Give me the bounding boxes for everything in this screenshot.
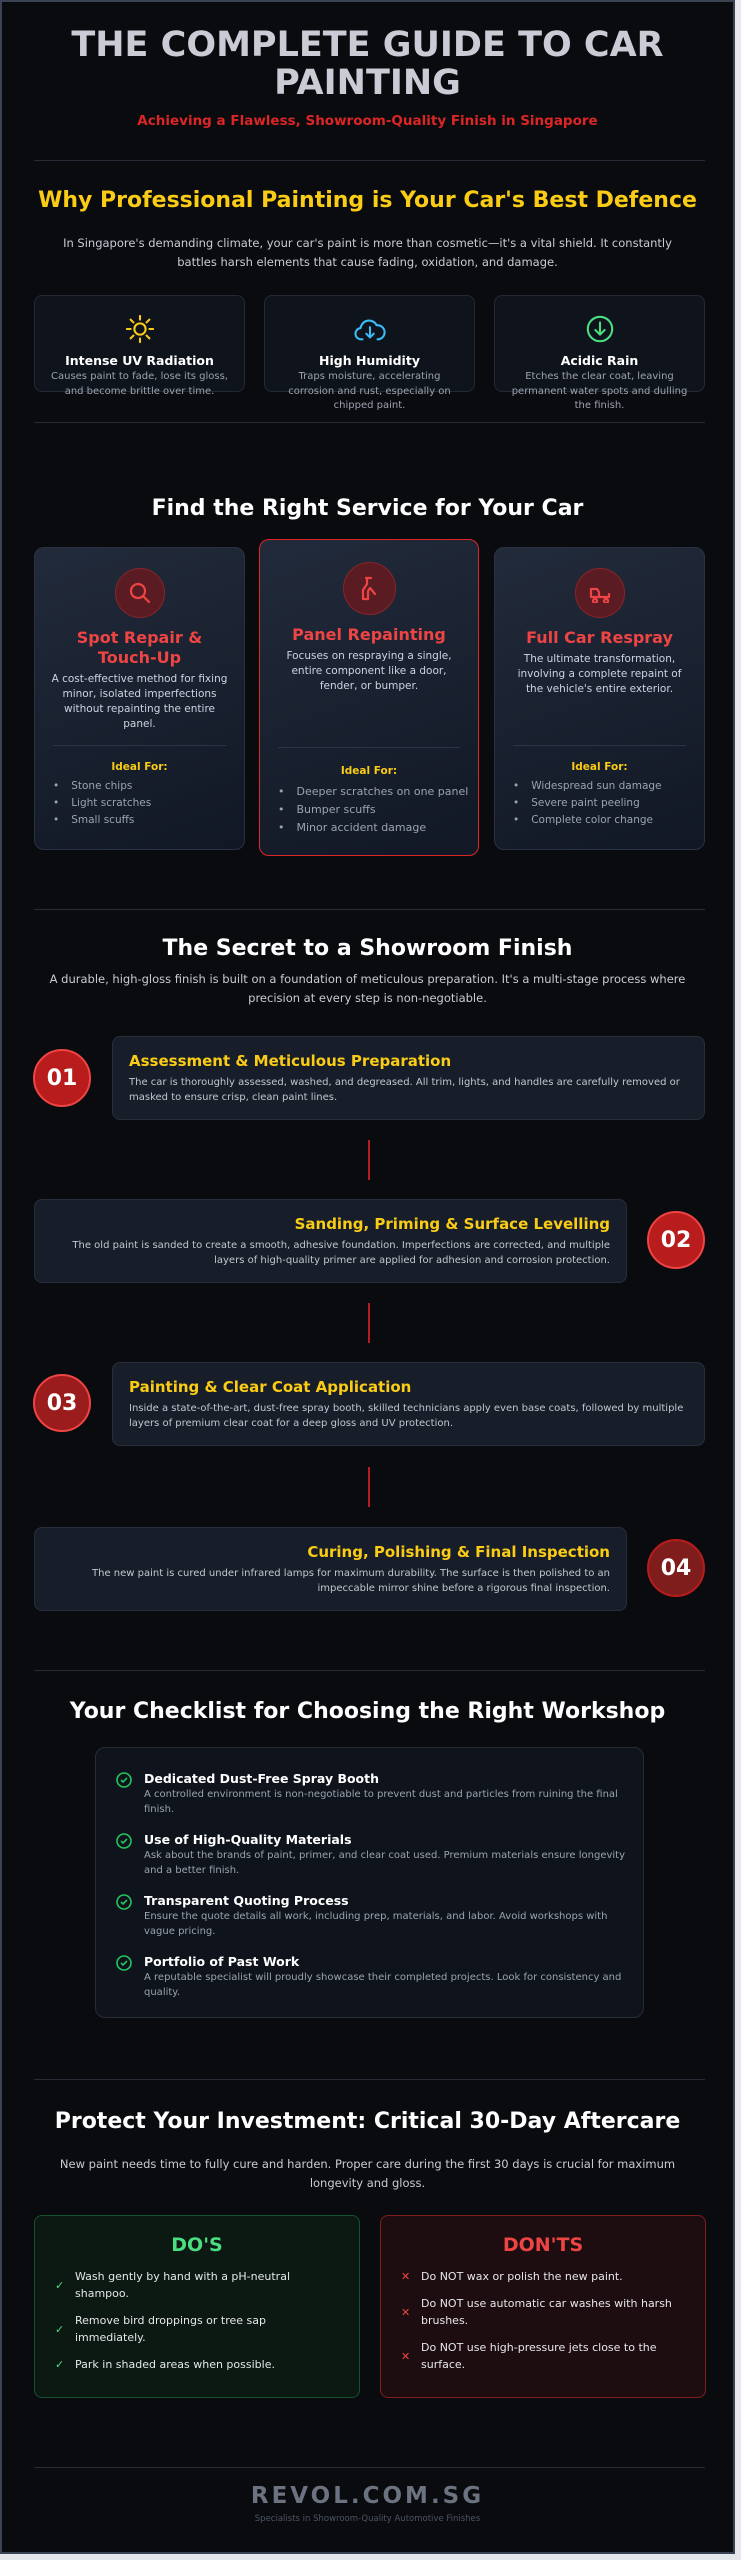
panel: don'ts: ✕ (401, 2270, 410, 2283)
service: full respray: Complete color change (531, 814, 653, 826)
service: full respray: Severe paint peeling (531, 797, 640, 809)
panel: don'ts: DON'TS (503, 2234, 583, 2256)
intro paragraph: In Singapore's demanding climate, your car's paint is more than cosmetic—it's a vital shield. It constantly battles harsh elements that cause fading, oxidation, and damage. (63, 236, 672, 269)
step 1 card (112, 1036, 705, 1120)
footer tagline: Specialists in Showroom-Quality Automotive Finishes (255, 2514, 480, 2524)
item: quoting: Transparent Quoting Process (144, 1893, 349, 1908)
panel: do's: ✓ (55, 2322, 64, 2336)
item: portfolio (116, 1954, 621, 1998)
service: spot repair: Spot Repair & (77, 628, 202, 647)
step 3 number: 03 (47, 1390, 77, 1416)
icon: magnifier (114, 568, 164, 618)
item: spray booth: A controlled environment is non-negotiable to prevent dust and particles from ruining the final finish. (144, 1789, 618, 1815)
service: full respray: Widespread sun damage (531, 780, 662, 792)
panel: don'ts: ✕ (401, 2350, 410, 2362)
heading: checklist: Your Checklist for Choosing the Right Workshop (70, 1699, 665, 1724)
service: panel repainting: Bumper scuffs (296, 803, 376, 816)
footer brand: REVOL.COM.SG (251, 2483, 484, 2509)
step 4 card: Curing, Polishing & Final Inspection (307, 1543, 610, 1561)
icon: arrow circle (586, 316, 614, 342)
step 3 card: Inside a state-of-the-art, dust-free spray booth, skilled technicians apply even base coats, followed by multiple layers of premium clear coat for a deep gloss and UV protection. (129, 1403, 683, 1429)
service: full respray: Ideal For: (571, 761, 628, 773)
service: full respray: Full Car Respray (526, 628, 673, 647)
step 2 number: 02 (661, 1228, 691, 1252)
card: UV (34, 295, 245, 392)
item: portfolio: A reputable specialist will proudly showcase their completed projects. Look for consistency and quality. (144, 1972, 621, 1998)
secret paragraph: A durable, high-gloss finish is built on a foundation of meticulous preparation. It's a multi-stage process where precision at every step is non-negotiable. (50, 972, 685, 1005)
service: spot repair: A cost-effective method for fixing minor, isolated imperfections without repainting the entire panel. (52, 673, 227, 730)
item: materials: Ask about the brands of paint, primer, and clear coat used. Premium materials ensure longevity and a better finish. (144, 1850, 625, 1876)
panel: do's: DO'S (171, 2234, 223, 2256)
step 1 card: The car is thoroughly assessed, washed, and degreased. All trim, lights, and handles are carefully removed or masked to ensure crisp, clean paint lines. (129, 1077, 680, 1103)
item: spray booth: Dedicated Dust-Free Spray Booth (144, 1771, 379, 1786)
panel: don'ts: Do NOT wax or polish the new paint. (421, 2270, 623, 2283)
panel: do's (34, 2215, 360, 2398)
connector (368, 1303, 370, 1343)
step 2 number (647, 1211, 705, 1269)
checklist panel (95, 1747, 644, 2018)
panel: do's: ✓ (55, 2358, 64, 2371)
card: UV: Intense UV Radiation (65, 353, 214, 368)
step 1 card: Assessment & Meticulous Preparation (129, 1052, 451, 1070)
step 1 number (33, 1049, 91, 1107)
item: quoting: Ensure the quote details all work, including prep, materials, and labor. Avoid workshops with vague pricing. (144, 1911, 607, 1937)
service: spot repair: Touch-Up (98, 648, 181, 667)
connector (368, 1140, 370, 1180)
heading: why professional painting: Why Professional Painting is Your Car's Best Defence (38, 188, 697, 213)
service: spot repair (34, 547, 245, 850)
card: humidity (264, 295, 475, 392)
step 2 card (34, 1199, 627, 1283)
subtitle: Achieving a Flawless, Showroom-Quality Finish in Singapore (137, 113, 598, 129)
icon: cloud (354, 320, 386, 340)
panel: don'ts (380, 2215, 706, 2398)
card: acid rain: Acidic Rain (561, 353, 638, 368)
service: panel repainting: Ideal For: (341, 765, 397, 777)
icon: car (574, 568, 624, 618)
item: materials (116, 1832, 625, 1876)
card: humidity: High Humidity (319, 353, 420, 368)
step 3 card (112, 1362, 705, 1446)
item: quoting (116, 1893, 607, 1937)
service: panel repainting: Deeper scratches on one panel (296, 785, 468, 798)
panel: do's: ✓ (55, 2278, 64, 2292)
step 3 card: Painting & Clear Coat Application (129, 1378, 411, 1396)
service: panel repainting: Panel Repainting (292, 625, 446, 644)
card: humidity: Traps moisture, accelerating corrosion and rust, especially on chipped paint. (288, 371, 451, 411)
panel: do's: Park in shaded areas when possible. (75, 2358, 275, 2371)
card: UV: Causes paint to fade, lose its gloss, and become brittle over time. (51, 371, 228, 396)
panel: do's: Remove bird droppings or tree sap immediately. (75, 2314, 266, 2344)
step 2 card: Sanding, Priming & Surface Levelling (295, 1215, 610, 1233)
step 4 card (34, 1527, 627, 1611)
item: spray booth (116, 1771, 618, 1815)
service: spot repair: Stone chips (71, 780, 132, 792)
service: spot repair: Ideal For: (111, 761, 168, 773)
step 1 number: 01 (47, 1066, 77, 1090)
heading: find the right service: Find the Right Service for Your Car (152, 496, 583, 521)
panel: don'ts: ✕ (401, 2306, 410, 2318)
item: portfolio: Portfolio of Past Work (144, 1954, 299, 1969)
icon: spray (342, 562, 396, 615)
step 3 number (33, 1374, 91, 1432)
service: panel repainting: Focuses on respraying a single, entire component like a door, fender, or bumper. (286, 650, 452, 692)
step 4 number: 04 (661, 1556, 691, 1580)
heading: secret: The Secret to a Showroom Finish (163, 936, 572, 961)
service: panel repainting: Minor accident damage (296, 821, 426, 834)
title: THE COMPLETE GUIDE TO CAR (71, 25, 664, 65)
panel: don'ts: Do NOT use high-pressure jets close to the surface. (421, 2341, 657, 2371)
step 4 card: The new paint is cured under infrared lamps for maximum durability. The surface is then polished to an impeccable mirror shine before a rigorous final inspection. (92, 1568, 610, 1594)
service: spot repair: Small scuffs (71, 814, 134, 826)
title: PAINTING (274, 63, 461, 103)
heading: aftercare: Protect Your Investment: Critical 30-Day Aftercare (55, 2109, 680, 2134)
panel: don'ts: Do NOT use automatic car washes with harsh brushes. (421, 2297, 672, 2327)
service: spot repair: Light scratches (71, 797, 151, 809)
connector (368, 1467, 370, 1507)
service: full respray (494, 547, 705, 850)
icon: sun (126, 314, 154, 344)
aftercare paragraph: New paint needs time to fully cure and harden. Proper care during the first 30 days is crucial for maximum longevity and gloss. (60, 2157, 675, 2190)
panel: do's: Wash gently by hand with a pH-neutral shampoo. (75, 2270, 290, 2300)
step 2 card: The old paint is sanded to create a smooth, adhesive foundation. Imperfections are corrected, and multiple layers of high-quality primer are applied for adhesion and corrosion protection. (72, 1240, 610, 1266)
card: acid rain: Etches the clear coat, leaving permanent water spots and dulling the finish. (512, 371, 687, 411)
service: full respray: The ultimate transformation, involving a complete repaint of the vehicle's entire exterior. (518, 653, 681, 695)
card: acid rain (494, 295, 705, 392)
service: panel repainting (259, 539, 479, 856)
step 4 number (647, 1539, 705, 1597)
item: materials: Use of High-Quality Materials (144, 1832, 352, 1847)
title (71, 25, 664, 103)
